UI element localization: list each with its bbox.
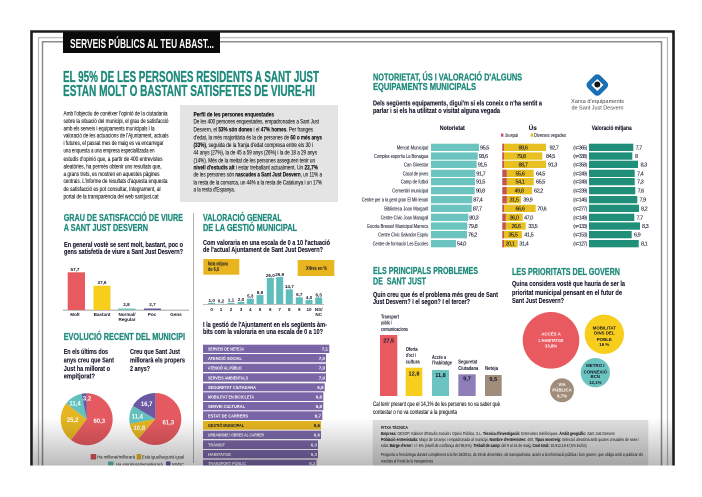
question: priorities: prioritat municipal pensant en el futur de: [512, 288, 622, 297]
use legend: Una vegada: [505, 133, 518, 139]
bar chart: score distribution: 4: [249, 307, 252, 312]
bar chart: main problems: Accés a: [432, 355, 446, 361]
bar list: rating by area: GESTIÓ MUNICIPAL: [208, 421, 244, 428]
column headings: Notorietat: [440, 125, 466, 132]
bar chart: use: 70,6: [537, 206, 547, 212]
bar list: rating by area: SERVEIS DE NETEJA: [208, 347, 245, 352]
bar list: rating by area: 7,0: [319, 366, 325, 371]
bar chart: average rating: 8,3: [642, 224, 649, 230]
title: ESTAN MOLT O BASTANT SATISFETES DE VIURE-HI: [63, 83, 315, 100]
bubble: housing access: [523, 312, 579, 369]
bar list: rating by area: ATENCIÓ AL PÚBLIC: [208, 364, 243, 371]
bubble: mobility in town: [585, 315, 624, 354]
bar chart: score distribution: 1,0: [209, 298, 215, 303]
bar chart: average rating: 8,1: [641, 242, 648, 248]
question: past two years: empitjorat?: [64, 372, 95, 380]
bar chart: awareness: 91,7: [476, 171, 486, 177]
bar list: rating by area: TRANSPORT PÚBLIC: [208, 460, 247, 466]
panel: profile of respondents: d'edat, la més majoritària és la de persones de 60 o més anys: [194, 134, 322, 141]
intro text block: de satisfacció es pot consultar, íntegrament, al: [64, 186, 160, 193]
heading: municipal management: VALORACIÓ GENERAL: [203, 211, 282, 224]
bar chart: main problems: 12,8: [409, 372, 419, 378]
facility names: Cementiri municipal: [392, 189, 428, 195]
bar chart: average rating: (n=146): [573, 198, 587, 204]
question: past two years: [64, 347, 114, 380]
bar chart: score distribution: 2,0: [238, 297, 245, 302]
bar chart: awareness: 91,5: [476, 180, 485, 186]
bubble: mobility in town: MOBILITAT: [593, 326, 616, 330]
heading: evolution: EVOLUCIÓ RECENT DEL MUNICIPI: [64, 330, 185, 343]
intro text block: i futures, el passat mes de maig es va encarregar: [64, 140, 164, 147]
pie chart: next two years: 11,4: [132, 414, 144, 420]
bar chart: awareness: 79,8: [468, 224, 478, 230]
bar chart: satisfaction: 37,6: [98, 280, 107, 285]
pie legend: Ha empitjorat/empitjorarà: [116, 462, 163, 467]
bar chart: use: 49,8: [515, 189, 524, 195]
panel: technical sheet: FITXA TÈCNICA: [381, 423, 408, 430]
question: past two years: anys creu que Sant: [64, 356, 114, 364]
bar chart: satisfaction: 57,7: [71, 267, 80, 272]
facility names: Centre de formació Les Escoles: [373, 242, 429, 248]
bar chart: use: 66,6: [516, 206, 525, 212]
bar chart: score distribution: 8,9: [257, 290, 264, 295]
bar chart: satisfaction: Gens: [170, 312, 182, 317]
bar chart: average rating: 7,9: [640, 198, 646, 204]
bar chart: main problems: 27,5: [383, 339, 394, 345]
bar chart: use: 54,1: [516, 180, 525, 186]
bar chart: main problems: 11,8: [435, 373, 446, 379]
question: past two years: En els últims dos: [64, 347, 108, 356]
bar list: rating by area: TRÀNSIT: [208, 442, 225, 448]
intro text block: amb els serveis i equipaments municipals i la: [64, 125, 155, 132]
bar chart: score distribution: [203, 272, 324, 317]
bar chart: average rating: (n=149): [573, 215, 587, 221]
bar chart: average rating: 7,7: [636, 145, 642, 151]
panel: profile of respondents: De les 400 persones enquestades, empadronades a Sant Just: [194, 119, 319, 126]
pie chart: next two years: 10,8: [133, 426, 146, 432]
panel: general rating of municipal management: [203, 211, 334, 468]
bar chart: main problems: 9,5: [489, 377, 497, 383]
bar chart: score distribution: 6: [269, 307, 272, 312]
question: main problems: Quin creu que és el problema més greu de Sant: [373, 290, 498, 299]
bar chart: average rating: 7,4: [637, 171, 644, 177]
facility names: Centre Cívic Salvador Espriu: [378, 233, 428, 239]
question: municipal management: de l'actual Ajuntament de Sant Just Desvern?: [203, 245, 323, 254]
facility names: Centre Cívic Joan Maragall: [381, 215, 428, 221]
panel: profile of respondents: [180, 105, 338, 202]
bar chart: use: 31,5: [510, 198, 519, 204]
section header band: [63, 32, 220, 53]
question: next two years: 2 anys?: [130, 364, 150, 373]
icon: facilities network logo: Xarxa d'equipaments: [571, 99, 624, 105]
pie legend: Està igual/seguirà igual: [142, 455, 184, 460]
heading: main problems: [373, 266, 478, 285]
bar chart: main problems: comunicacions: [381, 327, 408, 333]
heading: priorities: LES PRIORITATS DEL GOVERN: [512, 266, 620, 278]
bar chart: satisfaction: Molt: [70, 312, 80, 317]
question: main problems: [373, 292, 498, 306]
heading: facilities: [373, 70, 522, 93]
bar chart: average rating: (n=338): [573, 154, 587, 160]
question: municipal management: [203, 240, 330, 254]
bar list: rating by area: 6,6: [314, 423, 320, 428]
bar chart: score distribution: 26,9: [275, 272, 285, 277]
bar chart: average rating: 6,9: [634, 233, 641, 239]
intro text block: Amb l'objectiu de conèixer l'opinió de la ciutadania: [64, 110, 168, 118]
bubble: metro connection: METRO I: [586, 363, 604, 368]
callout: average score: de 6,6: [208, 267, 219, 273]
bar list: rating by area: URBANISME I OBRES AL CARRER: [208, 433, 265, 438]
bubble: housing access: ACCÉS A: [541, 332, 562, 336]
title: [64, 70, 319, 96]
bar chart: average rating: (n=249): [573, 180, 587, 186]
panel: awareness, use and rating of facilities: [362, 70, 649, 248]
bar list: rating by area: ESTAT DE CARRERS: [208, 414, 248, 418]
bar chart: use: 88,7: [519, 162, 528, 168]
bar list: rating by area: ATENCIÓ SOCIAL: [208, 354, 242, 361]
question: management areas: [203, 322, 327, 334]
bar chart: use: 35,5: [509, 233, 518, 239]
pie chart: past two years: 11,4: [69, 402, 81, 408]
pie legend: Ha millorat/millorarà: [97, 455, 135, 460]
bar list: rating by area: 6,2: [309, 461, 316, 466]
question: management areas: bits com la valoraria en una escala de 0 a 10?: [203, 327, 323, 336]
question: municipal management: Com valoraria en una escala de 0 a 10 l'actuació: [203, 238, 330, 247]
bar chart: average rating: (n=358): [573, 162, 587, 168]
panel: main problems: [373, 265, 502, 416]
bar chart: awareness: 91,5: [478, 162, 487, 168]
bar list: rating by area: 6,3: [311, 442, 317, 448]
bar chart: score distribution: 9: [298, 307, 301, 312]
panel: technical sheet: edat. Marge d'error: +/- 5% (nivell de confiança del 95,5%). Treball de camp: del 9 al 16 de maig. Cost total: 10.812,18 € (IVA inclòs): [381, 443, 587, 448]
panel: technical sheet: [373, 420, 648, 466]
facility names: [362, 145, 429, 248]
bar chart: score distribution: 0: [210, 307, 213, 312]
bar chart: average rating: 7,3: [637, 180, 644, 186]
bar chart: use: [502, 144, 559, 248]
callout: average score: Nota mitjana: [208, 262, 228, 268]
bar chart: score distribution: 6,7: [296, 292, 303, 297]
bubble: housing access: L'HABITATGE: [538, 338, 564, 343]
bar list: rating by area: SERVEIS AMBIENTALS: [208, 375, 248, 380]
facility names: Can Ginestar: [404, 162, 428, 168]
question: satisfaction: gens satisfet/a de viure a Sant Just Desvern?: [64, 247, 183, 256]
bar chart: main problems: l'habitatge: [432, 361, 452, 367]
pie chart: past two years: [61, 393, 113, 445]
bar chart: use: 47,0: [524, 215, 533, 221]
question: next two years: Creu que Sant Just: [130, 347, 180, 356]
callout: figures in percent: [298, 260, 334, 276]
bar chart: average rating: (n=127): [573, 242, 587, 248]
intro text block: sobre la situació del municipi, el grau de satisfacció: [64, 118, 169, 125]
bubble: mobility in town: DINS DEL: [594, 330, 615, 336]
bar chart: score distribution: 10: [306, 307, 312, 312]
bar chart: use: 36,0: [510, 215, 519, 221]
intro text block: estudis d'opinió que, a partir de 400 entrevistes: [64, 156, 162, 163]
bar chart: score distribution: 5,3: [247, 294, 254, 298]
pie chart: next two years: [129, 393, 181, 445]
bar chart: average rating: (n=365): [573, 145, 587, 151]
intro text block: una enquesta a una empresa especialitzada en: [64, 148, 155, 154]
bar chart: awareness: 95,5: [480, 145, 489, 151]
bar list: rating by area: 7,0: [319, 375, 325, 380]
bar chart: use: 41,5: [524, 233, 534, 239]
bar chart: use: 84,5: [546, 154, 555, 160]
bar chart: awareness: 80,3: [469, 215, 479, 221]
bar chart: main problems: cultura: [406, 359, 420, 365]
bar chart: score distribution: NC: [315, 312, 323, 317]
icon: facilities network logo: de Sant Just Desvern: [572, 106, 624, 112]
panel: profile of respondents: la resta de la comarca, un 44% a la resta de Catalunya i un 17%: [194, 179, 322, 186]
column headings: [440, 124, 632, 132]
intro text block: valoració de les actuacions de l'Ajuntament, actuals: [64, 132, 168, 140]
bar chart: awareness: [431, 144, 489, 248]
pie chart: next two years: 16,7: [141, 402, 153, 408]
bar chart: average rating: 8,2: [641, 206, 648, 212]
bubble: metro connection: 12,1%: [589, 380, 602, 385]
question: priorities: [512, 279, 626, 305]
bar list: rating by area: 6,7: [315, 414, 321, 418]
bar chart: average rating: (n=239): [573, 189, 587, 195]
question: priorities: Quina considera vostè que hauria de ser la: [512, 279, 626, 288]
intro text block: centrals. L'informe de resultats d'aquesta enquesta: [64, 178, 168, 185]
bar chart: satisfaction: Poc: [148, 312, 157, 317]
bar chart: satisfaction: Regular: [118, 317, 136, 322]
use legend: Diverses vegades: [534, 133, 566, 139]
bar chart: score distribution: 1: [220, 307, 223, 312]
bubble: metro connection: BCN: [591, 374, 600, 379]
bar list: rating by area: HABITATGE: [208, 452, 231, 457]
question: next two years: millorarà els propers: [130, 356, 185, 364]
bar chart: average rating: (n=277): [573, 206, 587, 212]
pie chart: past two years: 3,2: [83, 397, 92, 403]
callout: average score: [203, 259, 239, 275]
bar list: rating by area: 6,8: [316, 404, 322, 409]
title: EL 95% DE LES PERSONES RESIDENTS A SANT JUST: [63, 69, 319, 86]
icon: facilities network logo: [571, 76, 624, 112]
heading: satisfaction: [64, 212, 183, 232]
heading: satisfaction: GRAU DE SATISFACCIÓ DE VIURE: [64, 211, 183, 224]
bar chart: score distribution: 7: [278, 307, 281, 312]
bar chart: score distribution: 4,0: [306, 295, 313, 300]
facility names: Biblioteca Joan Margarit: [384, 206, 429, 212]
intro text block: aleatòries, ha permès obtenir uns resultats que,: [64, 164, 162, 170]
panel: profile of respondents: a la resta d'Espanya.: [194, 187, 235, 194]
question: past two years: Just ha millorat o: [64, 364, 110, 373]
bar chart: use: 20,1: [506, 242, 515, 248]
bar list: rating by area: 6,6: [314, 433, 320, 438]
bar chart: use: 64,5: [536, 171, 545, 177]
bar chart: awareness: 87,4: [473, 198, 483, 204]
panel: satisfaction with living in Sant Just: [63, 211, 189, 322]
bar chart: use: 79,8: [517, 154, 526, 160]
bar chart: average rating: [573, 144, 649, 248]
panel: profile of respondents: de les persones són nascudes a Sant Just Desvern, un 11% a: [194, 172, 322, 179]
bar chart: satisfaction: 2,8: [123, 302, 130, 307]
bar chart: score distribution: 2: [230, 307, 233, 312]
bar chart: main problems: 9,7: [463, 377, 471, 383]
bar chart: satisfaction: [63, 267, 189, 322]
question: facilities: [373, 100, 542, 114]
bar chart: use: 65,5: [536, 180, 545, 186]
panel: profile of respondents: Perfil de les persones enquestades: [194, 111, 274, 118]
bubble: mobility in town: 16 %: [599, 342, 609, 347]
bar list: rating by area: 7,0: [319, 356, 325, 361]
bar chart: score distribution: 0,2: [218, 298, 225, 304]
pie chart: next two years: 61,3: [162, 421, 175, 427]
bar chart: use: 88,6: [519, 145, 528, 151]
question: facilities: Dels següents equipaments, digui'm si els coneix o n'ha sentit a: [373, 98, 543, 108]
bubble: public roads: PÚBLICA: [552, 388, 573, 392]
pie legend: NS/NC: [172, 462, 184, 467]
heading: municipal management: DE LA GESTIÓ MUNICIPAL: [203, 221, 297, 234]
heading: municipal management: [202, 212, 297, 232]
column headings: Ús: [529, 123, 537, 132]
panel: profile of respondents: 44 anys (27%), la de 45 a 59 anys (26%) i la de 18 a 29 anys: [194, 150, 317, 157]
bubble: metro connection: [581, 358, 610, 387]
bar chart: score distribution: 8: [288, 307, 291, 312]
question: priorities: Sant Just Desvern?: [512, 296, 564, 305]
bar chart: main problems: Seguretat: [458, 360, 478, 366]
bar list: rating by area: SEGURETAT CIUTADANA: [208, 385, 257, 390]
bubble: metro connection: CONNEXIÓ: [584, 370, 608, 374]
facility names: Casal de joves: [403, 171, 429, 177]
panel: profile of respondents: (14%). Més de la meitat de les persones asseguren tenir un: [194, 157, 315, 164]
bar chart: main problems: Neteja: [485, 366, 498, 372]
facility names: Centre per a la gent gran El Mil·lenari: [362, 198, 428, 204]
bar chart: average rating: 8: [635, 154, 638, 160]
bar list: rating by area: MOBILITAT EN BICICLETA: [208, 394, 255, 400]
use legend: [501, 133, 566, 138]
pie chart: past two years: 60,3: [93, 419, 106, 425]
intro text block: [64, 110, 169, 200]
bar list: rating by area: 6,8: [316, 394, 322, 400]
bar chart: average rating: (n=153): [573, 233, 587, 239]
panel: profile of respondents: (33%), seguida de la franja d'edat compresa entre els 30 i: [194, 142, 313, 149]
bar chart: satisfaction: Normal/: [118, 312, 136, 317]
bubble: public roads: [550, 378, 574, 402]
callout: figures in percent: Xifres en %: [306, 266, 327, 272]
bar chart: awareness: 87,7: [473, 206, 482, 212]
bar chart: main problems: Transport: [381, 315, 399, 321]
pie chart: past two years: 25,2: [67, 418, 79, 424]
page frame: [32, 32, 674, 466]
bar list: rating by area: [203, 345, 329, 468]
bar chart: use: 62,2: [534, 189, 543, 195]
panel: technical sheet: Empresa: GESOP, Gabinet d'Estudis Socials i Opinió Pública, S.L. Tècnica d'investigació: Entrevistes telefòniques. Àmbit geogràfic: Sant Just Desvern: [381, 430, 615, 436]
bar chart: average rating: 7,7: [636, 215, 643, 221]
bar chart: awareness: 54,0: [457, 242, 466, 248]
column divider: [193, 213, 194, 463]
bar chart: satisfaction: 2,7: [149, 302, 156, 307]
panel: profile of respondents: nivell d'estudis alt i estar treballant actualment. Un 22,7%: [194, 164, 318, 171]
panel: technical sheet: Població entrevistada: Major de 18 anys i empadronada al municipi. Nombre d'entrevistes: 400. Tipus mostreig: Selecció aleatòria amb quotes creuades de sexe i: [381, 437, 639, 442]
bar chart: main problems: Ciutadana: [458, 366, 478, 372]
heading: facilities: EQUIPAMENTS MUNICIPALS: [373, 81, 476, 93]
bar chart: use: 33,5: [528, 224, 538, 230]
bar chart: average rating: (n=133): [573, 224, 587, 230]
bar chart: main problems: Oferta: [406, 347, 418, 353]
intro text block: portal de la transparència del web santjust.cat: [64, 194, 159, 200]
bar chart: score distribution: 1,1: [228, 298, 235, 303]
question: main problems: Just Desvern? I el segon? I el tercer?: [373, 297, 470, 306]
pie legend: [90, 454, 184, 466]
bar list: rating by area: 6,3: [311, 452, 317, 457]
bar list: rating by area: 6,9: [317, 385, 324, 390]
panel: technical sheet: resultats al Portal de la transparència: [381, 458, 433, 464]
question: satisfaction: [64, 242, 183, 256]
bar chart: use: 92,7: [550, 145, 559, 151]
facility names: Camp de futbol: [401, 180, 428, 186]
bar chart: use: 55,6: [516, 171, 525, 177]
bar chart: score distribution: NS/: [315, 307, 323, 312]
bar chart: use: 26,6: [512, 224, 521, 230]
bar chart: use: 39,9: [523, 198, 533, 204]
bar chart: score distribution: 3: [240, 307, 243, 312]
note: unanswered share: [373, 401, 500, 416]
panel: profile of respondents: Desvern, el 53% són dones i el 47% homes. Per franges: [194, 127, 313, 134]
heading: main problems: DE SANT JUST: [373, 276, 426, 288]
bar chart: awareness: 76,2: [468, 233, 477, 239]
question: facilities: parlar i si els ha utilitzat o visitat alguna vegada: [373, 106, 501, 115]
bar chart: score distribution: 5: [259, 307, 262, 312]
facility names: Escola Bressol Municipal Marrecs: [367, 224, 429, 230]
note: unanswered share: Cal tenir present que el 14,1% de les persones no va saber què: [373, 401, 500, 408]
bubble: mobility in town: POBLE: [597, 337, 612, 342]
question: satisfaction: En general vostè se sent molt, bastant, poc o: [64, 240, 183, 249]
panel: recent evolution of the municipality: [61, 330, 185, 467]
bar chart: awareness: 90,8: [476, 189, 485, 195]
heading: facilities: NOTORIETAT, ÚS I VALORACIÓ D'ALGUNS: [373, 70, 522, 84]
bar chart: main problems: [380, 315, 502, 396]
bar chart: satisfaction: Bastant: [94, 312, 111, 317]
question: management areas: I la gestió de l'Ajuntament en els següents àm-: [203, 320, 327, 329]
bar chart: awareness: 93,6: [479, 154, 488, 160]
note: unanswered share: contestar o no va contestar a la pregunta: [373, 409, 457, 416]
bar chart: score distribution: 6,5: [316, 292, 322, 297]
heading: satisfaction: A SANT JUST DESVERN: [64, 222, 148, 234]
question: next two years: [130, 347, 185, 373]
panel: government priorities: [512, 266, 626, 402]
heading: main problems: ELS PRINCIPALS PROBLEMES: [373, 265, 478, 277]
bar chart: main problems: públic /: [381, 320, 392, 326]
bar list: rating by area: 7,1: [322, 347, 328, 352]
bar chart: main problems: d'oci i: [406, 353, 416, 359]
bar list: rating by area: SERVEI CULTURAL: [208, 404, 245, 409]
bar chart: score distribution: 26,0: [266, 273, 275, 278]
section header band: SERVEIS PÚBLICS AL TEU ABAST...: [70, 36, 214, 51]
column headings: Valoració mitjana: [592, 125, 632, 132]
facility names: Complex esportiu La Bonaigua: [374, 154, 428, 160]
bar chart: average rating: (n=249): [573, 171, 587, 177]
bar chart: average rating: 7,6: [638, 189, 644, 195]
bubble: public roads: 9,7%: [557, 394, 567, 398]
bar chart: score distribution: 14,7: [285, 284, 294, 289]
bar chart: use: 31,4: [519, 242, 529, 248]
bubble: housing access: 33,8%: [545, 344, 557, 348]
facility names: Mercat Municipal: [397, 145, 428, 151]
intro text block: a grans trets, es mostren en aquestes pàgines: [64, 171, 160, 178]
bubble: public roads: VIA: [558, 382, 566, 387]
bar chart: use: 91,3: [548, 162, 557, 168]
bar chart: average rating: 8,3: [640, 162, 647, 168]
